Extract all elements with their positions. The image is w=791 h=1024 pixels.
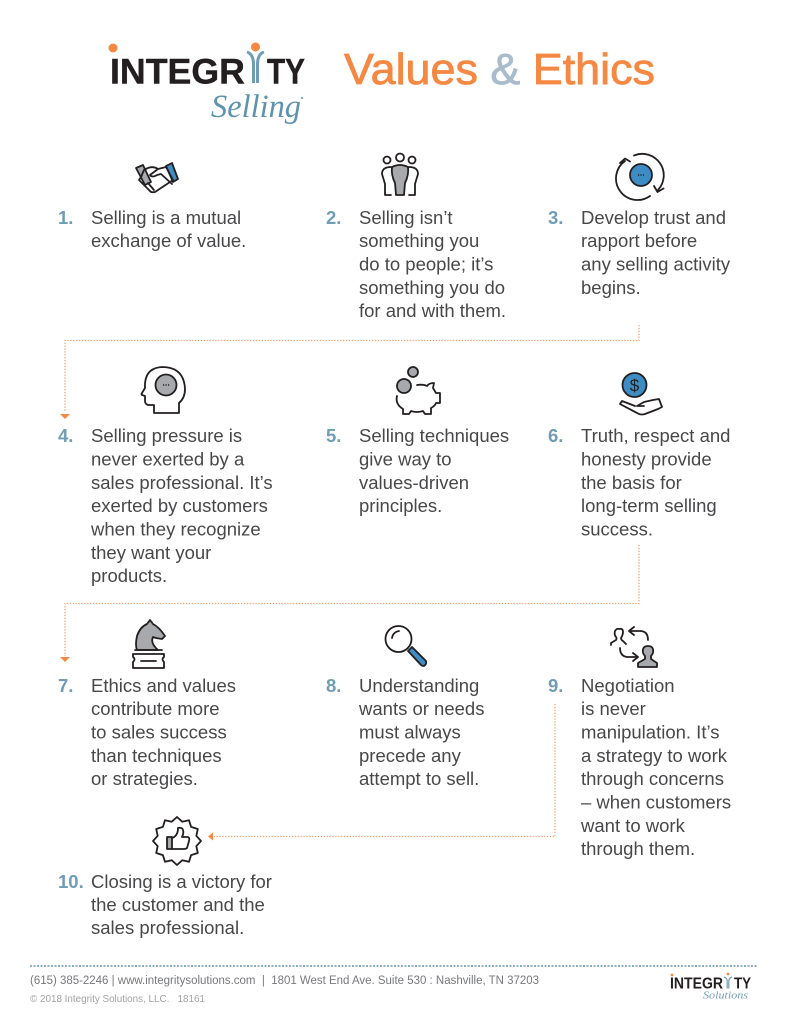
footer logo: Integrity Solutions: TY — [734, 976, 751, 992]
item 9: 9. — [548, 675, 563, 696]
logo: Integrity Selling: TY — [267, 52, 305, 92]
item 1 — [58, 207, 246, 251]
item 6: 6. — [548, 425, 563, 446]
item 9: through them. — [581, 838, 695, 859]
title: Values & Ethics — [344, 45, 655, 94]
footer contact line: (615) 385-2246 | www.integritysolutions.com | 1801 West End Ave. Suite 530 : Nashville, TN 37203 — [30, 975, 539, 987]
icon: hand holding dollar coin: $ — [630, 376, 640, 395]
item 1: exchange of value. — [91, 230, 246, 251]
icon: magnifying glass — [386, 626, 426, 666]
item 10: the customer and the — [91, 894, 265, 915]
item 4: 4. — [58, 425, 73, 446]
icon: thumbs up badge — [153, 817, 201, 865]
item 4: when they recognize — [90, 518, 261, 540]
item 6: Truth, respect and — [581, 425, 730, 446]
item 10: sales professional. — [91, 917, 244, 938]
item 3: 3. — [548, 207, 563, 228]
item 7: than techniques — [91, 745, 222, 766]
item 2: do to people; it’s — [359, 254, 493, 274]
footer dotted divider — [30, 965, 757, 967]
item 2: something you — [359, 230, 479, 251]
logo: Integrity Selling: INTEGR — [110, 52, 245, 92]
item 4: never exerted by a — [91, 448, 245, 470]
item 5: Selling techniques — [359, 425, 509, 446]
arrow: 3 to 4 — [60, 325, 639, 419]
icon: team of people — [382, 154, 418, 195]
item 7: or strategies. — [91, 768, 198, 789]
icon: chat with cycle arrows — [616, 154, 664, 200]
item 6 — [548, 425, 730, 540]
item 3: any selling activity — [581, 254, 731, 274]
item 8: precede any — [359, 745, 462, 766]
item 9: through concerns — [581, 768, 724, 789]
arrow: 6 to 7 — [60, 545, 639, 662]
item 4 — [58, 425, 273, 586]
item 5: principles. — [359, 495, 442, 516]
item 7: Ethics and values — [91, 675, 236, 696]
item 9: manipulation. It’s — [581, 722, 720, 742]
item 8: must always — [359, 722, 461, 742]
item 6: the basis for — [581, 472, 682, 493]
item 5: 5. — [326, 425, 341, 446]
icon: chess knight — [133, 620, 165, 668]
item 1: Selling is a mutual — [91, 207, 241, 228]
item 9: Negotiation — [581, 675, 675, 696]
item 2: something you do — [359, 277, 505, 298]
item 10 — [58, 871, 272, 938]
arrow: 9 to 10 — [208, 704, 555, 840]
item 8: Understanding — [359, 675, 479, 696]
item 7: to sales success — [91, 722, 227, 742]
item 3: Develop trust and — [581, 207, 726, 228]
icon: head with speech bubble — [142, 367, 185, 413]
item 3: begins. — [581, 277, 641, 298]
item 1: 1. — [58, 207, 73, 228]
item 2: Selling isn’t — [359, 207, 453, 228]
item 5: give way to — [359, 448, 452, 470]
item 4: sales professional. It’s — [91, 472, 273, 493]
item 6: honesty provide — [581, 448, 712, 470]
item 5: values-driven — [359, 472, 469, 493]
item 9 — [548, 675, 731, 859]
item 6: success. — [581, 518, 653, 540]
footer logo: Integrity Solutions: INTEGR — [670, 976, 723, 992]
item 9: want to work — [580, 815, 686, 836]
item 6: long-term selling — [581, 495, 717, 516]
item 10: Closing is a victory for — [91, 871, 272, 892]
item 2: for and with them. — [359, 300, 506, 321]
item 7: contribute more — [91, 698, 220, 719]
item 2 — [326, 207, 506, 321]
item 8: attempt to sell. — [359, 768, 479, 789]
item 4: they want your — [91, 542, 211, 563]
item 3 — [548, 207, 731, 298]
footer logo: Integrity Solutions — [670, 973, 751, 1002]
item 7: 7. — [58, 675, 73, 696]
item 4: Selling pressure is — [91, 425, 242, 446]
icon: hand holding dollar coin — [620, 373, 662, 414]
footer logo: Integrity Solutions: Solutions — [703, 990, 748, 1002]
item 2: 2. — [326, 207, 341, 228]
item 8: 8. — [326, 675, 341, 696]
item 3: rapport before — [581, 230, 697, 251]
icon: two people negotiating — [611, 627, 657, 667]
item 10: 10. — [58, 871, 84, 892]
item 9: – when customers — [581, 792, 731, 812]
logo: Integrity Selling — [108, 42, 305, 125]
logo: Integrity Selling: Selling — [211, 89, 301, 125]
item 4: products. — [91, 565, 167, 586]
icon: handshake — [136, 163, 178, 192]
icon: piggy bank with coins — [397, 367, 440, 414]
item 7 — [58, 675, 236, 789]
item 5 — [326, 425, 509, 516]
item 9: is never — [581, 698, 646, 719]
footer copyright: © 2018 Integrity Solutions, LLC. 18161 — [30, 993, 205, 1005]
item 8: wants or needs — [358, 698, 484, 719]
item 8 — [326, 675, 484, 789]
item 9: a strategy to work — [581, 745, 728, 766]
item 4: exerted by customers — [91, 495, 268, 516]
